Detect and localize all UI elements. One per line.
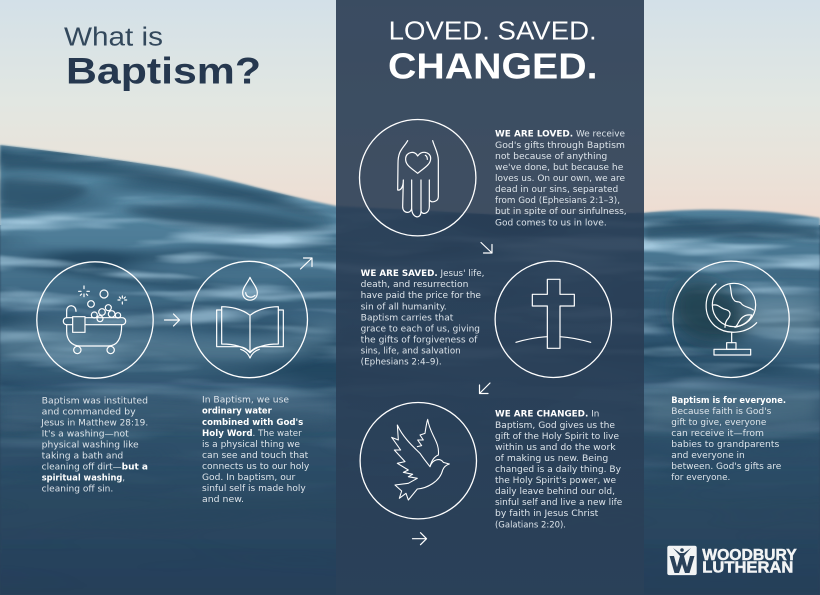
text: Baptism instituted: physical washing like bbox=[42, 440, 139, 450]
logo: Woodbury Lutheran: LUTHERAN bbox=[702, 560, 793, 577]
heading: What is Baptism? bbox=[64, 24, 261, 91]
logo: Woodbury Lutheran bbox=[667, 546, 797, 577]
text: We are changed bbox=[495, 410, 622, 530]
text: We are saved: death, and resurrection bbox=[361, 280, 468, 290]
text: Baptism instituted bbox=[40, 396, 148, 495]
text: ordinary water and Word: can see and touch that bbox=[202, 451, 309, 461]
text: Baptism instituted: spiritual washing, bbox=[42, 474, 125, 484]
text: ordinary water and Word: Holy Word. The water bbox=[202, 429, 302, 439]
arrow: up-right bbox=[300, 258, 312, 269]
heading: What is Baptism?: What is bbox=[64, 24, 163, 52]
text: ordinary water and Word: ordinary water bbox=[202, 407, 272, 417]
text: We are changed: within us and do the work bbox=[495, 443, 616, 453]
text: ordinary water and Word: God. In baptism, our bbox=[202, 473, 296, 483]
text: ordinary water and Word: connects us to our holy bbox=[202, 462, 309, 472]
text: Baptism is for everyone: can receive it—from bbox=[671, 429, 764, 439]
text: Baptism instituted: taking a bath and bbox=[42, 452, 123, 462]
text: ordinary water and Word: and new. bbox=[202, 495, 244, 505]
text: We are saved: grace to each of us, giving bbox=[361, 324, 480, 334]
text: Baptism is for everyone: Baptism is for everyone. bbox=[671, 396, 786, 406]
text: We are saved: WE ARE SAVED. Jesus' life, bbox=[361, 269, 484, 279]
panel: centre dark overlay bbox=[336, 0, 644, 595]
text: We are loved: dead in our sins, separated bbox=[495, 185, 618, 195]
text: We are loved: loves us. On our own, we are bbox=[495, 174, 625, 184]
text: We are changed: WE ARE CHANGED. In bbox=[495, 410, 599, 420]
text: We are loved: but in spite of our sinfulness, bbox=[495, 207, 627, 217]
text: Baptism instituted: It's a washing—not bbox=[42, 430, 129, 440]
icon: dove in circle bbox=[360, 402, 476, 519]
text: We are saved: sins, life, and salvation bbox=[361, 347, 461, 357]
text: We are loved: WE ARE LOVED. We receive bbox=[495, 130, 625, 140]
text: Baptism is for everyone: between. God's gifts are bbox=[671, 462, 781, 472]
heading: Loved. Saved. Changed. bbox=[388, 15, 598, 86]
text: Baptism is for everyone: for everyone. bbox=[671, 473, 730, 483]
icon: globe in circle bbox=[673, 261, 789, 377]
text: We are loved bbox=[495, 130, 627, 228]
text: We are loved: not because of anything bbox=[495, 152, 607, 162]
icon: cross on hill in circle bbox=[495, 261, 612, 377]
text: Baptism is for everyone bbox=[671, 396, 786, 483]
text: Baptism is for everyone: and everyone in bbox=[671, 451, 745, 461]
text: We are changed: of making us new. Being bbox=[495, 454, 608, 464]
arrow: bath to book bbox=[164, 314, 180, 326]
text: We are loved: we've done, but because he bbox=[495, 163, 623, 173]
icon: bathtub in circle bbox=[37, 262, 153, 378]
text: We are changed: Baptism, God gives us the bbox=[495, 421, 615, 431]
text: Baptism instituted: Baptism was instituted bbox=[42, 396, 148, 406]
text: ordinary water and Word: sinful self is made holy bbox=[202, 484, 306, 494]
text: We are saved: sin of all humanity. bbox=[361, 302, 447, 312]
text: Baptism is for everyone: Because faith is God's bbox=[671, 407, 772, 417]
text: We are saved bbox=[361, 269, 484, 368]
text: We are loved: from God (Ephesians 2:1–3), bbox=[495, 196, 620, 206]
arrow: down-left bbox=[480, 383, 490, 394]
text: ordinary water and Word: In Baptism, we use bbox=[202, 396, 289, 406]
text: ordinary water and Word: is a physical thing we bbox=[202, 440, 300, 450]
text: We are loved: God comes to us in love. bbox=[495, 218, 607, 228]
text: We are saved: (Ephesians 2:4–9). bbox=[361, 358, 442, 368]
text: Baptism is for everyone: babies to grandparents bbox=[671, 440, 780, 450]
text: ordinary water and Word bbox=[202, 396, 309, 505]
text: Baptism instituted: Jesus in Matthew 28:19. bbox=[40, 418, 148, 428]
text: Baptism instituted: cleaning off dirt— but a bbox=[42, 463, 148, 473]
logo: Woodbury Lutheran: WOODBURY bbox=[702, 547, 797, 564]
text: We are changed: (Galatians 2:20). bbox=[495, 520, 566, 530]
heading: What is Baptism?: Baptism? bbox=[66, 49, 261, 91]
text: We are changed: by faith in Jesus Christ bbox=[495, 509, 599, 519]
text: Baptism instituted: cleaning off sin. bbox=[42, 485, 113, 495]
text: We are saved: the gifts of forgiveness of bbox=[361, 336, 478, 346]
text: We are changed: changed is a daily thing. By bbox=[495, 465, 621, 475]
text: We are loved: God's gifts through Baptism bbox=[495, 141, 625, 151]
text: We are changed: the Holy Spirit's power, we bbox=[495, 476, 616, 486]
icon: hand with heart in circle bbox=[360, 120, 476, 236]
heading: Loved. Saved. Changed.: CHANGED. bbox=[388, 45, 598, 86]
text: We are saved: Baptism carries that bbox=[361, 313, 454, 323]
arrow: down-right bbox=[481, 242, 492, 253]
arrow: right, bottom of panel bbox=[412, 533, 426, 545]
text: Baptism is for everyone: gift to give, everyone bbox=[671, 418, 766, 428]
text: We are saved: have paid the price for the bbox=[361, 291, 481, 301]
text: We are changed: sinful self and live a new life bbox=[495, 498, 622, 508]
heading: Loved. Saved. Changed.: LOVED. SAVED. bbox=[389, 15, 597, 45]
icon: open book with water drop in circle bbox=[191, 261, 308, 378]
text: ordinary water and Word: combined with God's bbox=[202, 418, 303, 428]
text: We are changed: gift of the Holy Spirit to live bbox=[495, 432, 619, 442]
text: We are changed: daily leave behind our old, bbox=[495, 487, 615, 497]
text: Baptism instituted: and commanded by bbox=[42, 407, 136, 417]
